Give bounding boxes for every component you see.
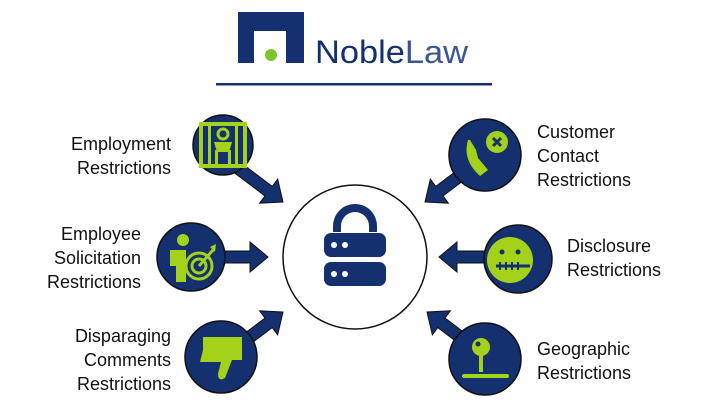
icon: disparaging (thumbs down) xyxy=(185,321,257,393)
icon: disclosure (zipped face) xyxy=(484,225,552,293)
arrow: geographic xyxy=(418,300,480,357)
icon: employment (jail) xyxy=(193,115,253,175)
icon: geographic (pin) xyxy=(449,323,521,395)
label: disparaging: Restrictions xyxy=(77,374,171,394)
label: employment: Restrictions xyxy=(77,158,171,178)
label: customer: Customer xyxy=(537,122,615,142)
label: solicitation: Solicitation xyxy=(54,248,141,268)
arrow: customer xyxy=(416,157,478,214)
label: disparaging: Comments xyxy=(84,350,171,370)
label: customer: Contact xyxy=(537,146,599,166)
logo xyxy=(238,12,469,70)
icon: customer contact xyxy=(449,119,521,191)
label: disclosure: Disclosure xyxy=(567,236,651,256)
label: solicitation: Employee xyxy=(61,224,141,244)
label: geographic: Restrictions xyxy=(537,363,631,383)
label: solicitation: Restrictions xyxy=(47,272,141,292)
label: disparaging: Disparaging xyxy=(75,326,171,346)
arrow: disclosure xyxy=(439,242,489,272)
label: geographic: Geographic xyxy=(537,339,630,359)
arrow: disparaging xyxy=(230,300,292,357)
arrow: employment xyxy=(230,157,292,214)
logo: NobleLaw xyxy=(315,34,469,70)
label: disclosure: Restrictions xyxy=(567,260,661,280)
label: customer: Restrictions xyxy=(537,170,631,190)
arrows xyxy=(223,157,489,357)
icon: solicitation (person+target) xyxy=(157,223,225,291)
arrow: solicitation xyxy=(223,242,268,272)
label: employment: Employment xyxy=(71,134,171,154)
labels xyxy=(47,122,661,394)
center circle with lock icon xyxy=(283,185,427,329)
